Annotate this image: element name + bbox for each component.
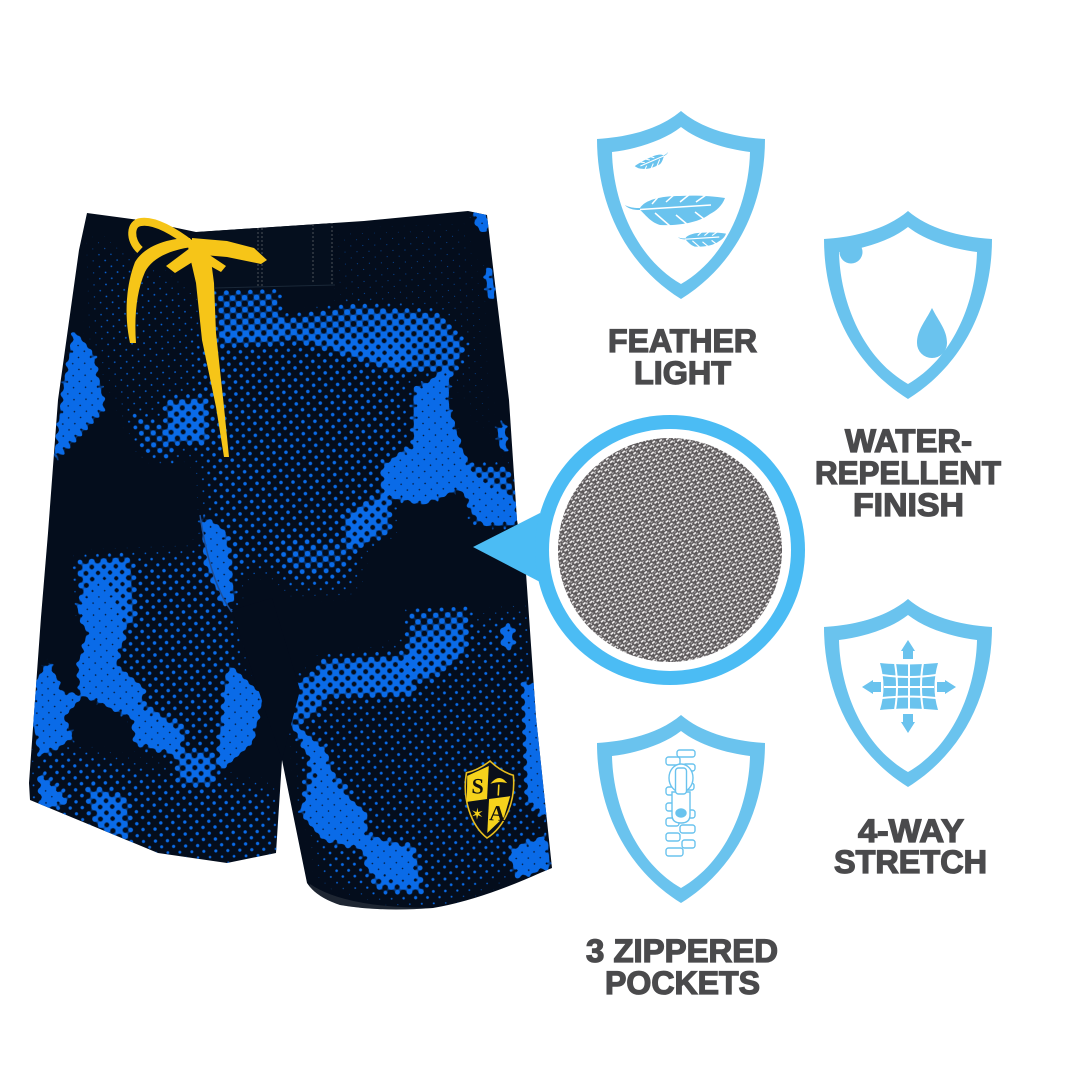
feature: 4-way stretch — [824, 599, 992, 880]
callout: fabric close-up — [473, 415, 805, 685]
label: LIGHT — [634, 355, 731, 391]
label: POCKETS — [605, 965, 760, 1001]
icon: water bead — [840, 240, 862, 264]
product photo: board shorts — [29, 211, 552, 910]
shorts fabric — [29, 211, 552, 910]
label — [815, 423, 1001, 523]
logo crest: A — [489, 800, 506, 826]
shield — [824, 599, 992, 787]
feature: feather light — [597, 111, 765, 391]
shield — [597, 715, 765, 903]
waistband patch — [196, 222, 335, 288]
label — [586, 933, 778, 1001]
label: STRETCH — [834, 844, 987, 880]
callout pointer — [473, 513, 540, 582]
label: REPELLENT — [815, 455, 1001, 491]
label — [608, 323, 757, 391]
label: WATER- — [845, 423, 972, 459]
logo crest — [463, 760, 515, 839]
small feather lower — [678, 232, 726, 247]
hem shadow — [310, 884, 427, 910]
small feather upper — [634, 148, 671, 175]
label: 4-WAY — [858, 813, 964, 849]
feature: water-repellent finish — [815, 211, 1001, 523]
logo crest: ✶ — [470, 804, 484, 824]
icon: stretching grid with arrows — [862, 640, 956, 733]
large feather — [625, 194, 725, 226]
callout ring — [535, 415, 805, 685]
drawstring — [127, 222, 267, 457]
icon: feathers — [625, 148, 726, 247]
feature: 3 zippered pockets — [586, 715, 778, 1001]
icon: zipper — [666, 750, 695, 856]
label — [834, 813, 987, 880]
shield — [597, 111, 765, 299]
fabric texture — [558, 438, 782, 662]
shield — [824, 211, 992, 399]
label: 3 ZIPPERED — [586, 933, 778, 969]
label: FEATHER — [608, 323, 757, 359]
logo crest: S — [471, 773, 484, 799]
fly and crotch shading — [232, 609, 300, 730]
label: FINISH — [853, 487, 964, 523]
icon: water drop — [917, 308, 947, 358]
